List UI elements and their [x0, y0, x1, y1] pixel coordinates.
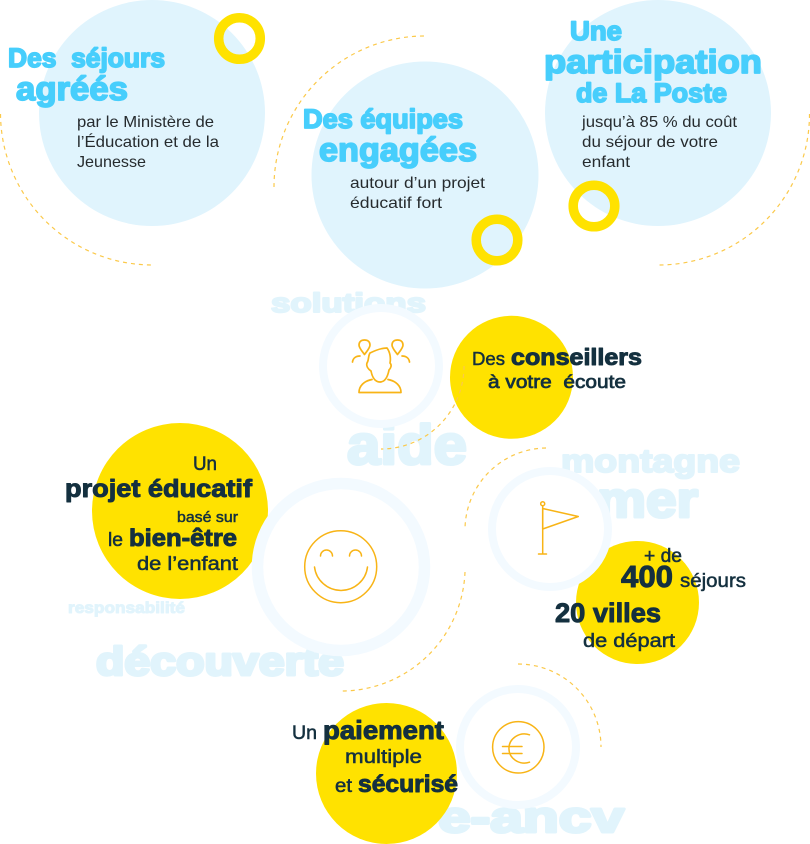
- text: Un projet éducatif basé sur le bien-être de l'enfant: de l’enfant: [137, 554, 239, 575]
- dashed arc: séjours: [0, 114, 152, 265]
- heading: Des séjours agréés: agréés: [16, 70, 128, 107]
- blue circle: équipes: [312, 62, 538, 288]
- text: Un paiement multiple et sécurisé: multiple: [345, 747, 422, 768]
- background word: responsabilité: responsabilité: [68, 600, 185, 617]
- dashed arc: équipes: [274, 36, 425, 187]
- panel: conseillers: [323, 308, 642, 449]
- text: + de 400 séjours 20 villes de départ: 400: [621, 559, 673, 594]
- blue circle: séjours: [39, 0, 265, 226]
- dashed arc: flag: [465, 448, 546, 530]
- heading: Des séjours agréés: [8, 43, 165, 107]
- text: Un projet éducatif basé sur le bien-être de l'enfant: projet éducatif: [65, 475, 253, 503]
- text: + de 400 séjours 20 villes de départ: [555, 546, 746, 652]
- text: + de 400 séjours 20 villes de départ: 20 villes: [555, 598, 661, 628]
- yellow ring: séjours: [219, 18, 260, 59]
- background word: solutions: solutions: [271, 288, 426, 318]
- heading: Des équipes engagées: Des équipes: [303, 104, 463, 134]
- yellow ring: équipes: [476, 219, 518, 261]
- yellow circle: conseillers: [450, 316, 573, 439]
- text: Des conseillers à votre écoute: à votre écoute: [488, 372, 626, 392]
- heading: Une participation de La Poste: de La Poste: [576, 78, 727, 108]
- text: Un paiement multiple et sécurisé: [292, 715, 458, 798]
- text: jusqu'à 85 %: enfant: [582, 154, 631, 171]
- icon ring: euro: [460, 689, 576, 805]
- dashed arc: euro: [518, 664, 601, 747]
- panel: séjours et villes: [465, 448, 746, 664]
- icon: people: [352, 340, 410, 392]
- heading: Des équipes engagées: engagées: [319, 131, 477, 168]
- yellow circle: séjours et villes: [576, 541, 699, 664]
- text: Des conseillers à votre écoute: Des: [472, 349, 505, 369]
- yellow circle: projet éducatif: [92, 423, 268, 599]
- background word: découverte: découverte: [96, 640, 344, 684]
- dashed arc: participation: [658, 114, 810, 265]
- text: par le Ministère: [77, 114, 219, 171]
- icon ring: flag: [492, 471, 608, 587]
- text: Un projet éducatif basé sur le bien-être de l'enfant: le: [108, 530, 123, 551]
- text: jusqu'à 85 %: [581, 114, 738, 171]
- panel: projet éducatif: [65, 423, 465, 691]
- heading: Des équipes engagées: [303, 104, 477, 168]
- icon ring: conseillers: [323, 308, 439, 424]
- text: autour d'un projet: éducatif fort: [350, 195, 443, 212]
- text: Un paiement multiple et sécurisé: paiement: [323, 715, 444, 745]
- text: autour d'un projet: [350, 175, 486, 212]
- background word: montagne: montagne: [561, 443, 740, 479]
- panel: participation de La Poste: [544, 0, 810, 265]
- heading: Une participation de La Poste: [544, 16, 762, 108]
- icon: flag: [538, 502, 578, 554]
- text: Un projet éducatif basé sur le bien-être de l'enfant: [65, 454, 253, 575]
- icon: smiley: [305, 531, 377, 603]
- heading: Des séjours agréés: Des séjours: [8, 43, 165, 73]
- yellow circle: paiement: [316, 703, 457, 844]
- heading: Une participation de La Poste: Une: [570, 16, 622, 46]
- text: Un projet éducatif basé sur le bien-être de l'enfant: Un: [193, 454, 217, 475]
- panel: paiement: [292, 664, 601, 844]
- text: Un projet éducatif basé sur le bien-être de l'enfant: basé sur: [177, 509, 238, 526]
- text: par le Ministère: Jeunesse: [77, 154, 146, 171]
- background word: e-ancv: e-ancv: [438, 793, 625, 842]
- panel: équipes engagées: [274, 36, 538, 288]
- text: par le Ministère: l’Éducation et de la: [77, 132, 219, 151]
- icon: euro: [493, 722, 544, 773]
- background word: aide: aide: [347, 413, 467, 476]
- text: + de 400 séjours 20 villes de départ: séjours: [680, 571, 746, 592]
- text: Un paiement multiple et sécurisé: et: [335, 776, 353, 797]
- text: Un paiement multiple et sécurisé: sécurisé: [358, 771, 458, 798]
- blue circle: participation: [545, 0, 771, 226]
- text: Un projet éducatif basé sur le bien-être de l'enfant: bien-être: [129, 525, 237, 552]
- text: Un paiement multiple et sécurisé: Un: [292, 723, 317, 744]
- text: autour d'un projet: autour d’un projet: [350, 175, 486, 192]
- text: jusqu'à 85 %: du séjour de votre: [582, 134, 718, 151]
- icon ring: smiley: [258, 484, 424, 650]
- text: jusqu'à 85 %: jusqu’à 85 % du coût: [581, 114, 738, 131]
- dashed arc: smiley: [341, 572, 465, 691]
- text: + de 400 séjours 20 villes de départ: de départ: [583, 631, 676, 652]
- heading: Une participation de La Poste: participation: [544, 43, 762, 80]
- text: + de 400 séjours 20 villes de départ: + de: [644, 546, 682, 567]
- text: Des conseillers à votre écoute: [472, 344, 642, 392]
- text: par le Ministère: par le Ministère de: [77, 114, 214, 131]
- yellow ring: participation: [573, 185, 615, 227]
- background word: mer: mer: [597, 472, 698, 528]
- dashed arc: conseillers: [381, 366, 464, 449]
- panel: séjours agréés: [0, 0, 265, 265]
- text: Des conseillers à votre écoute: conseillers: [511, 344, 642, 370]
